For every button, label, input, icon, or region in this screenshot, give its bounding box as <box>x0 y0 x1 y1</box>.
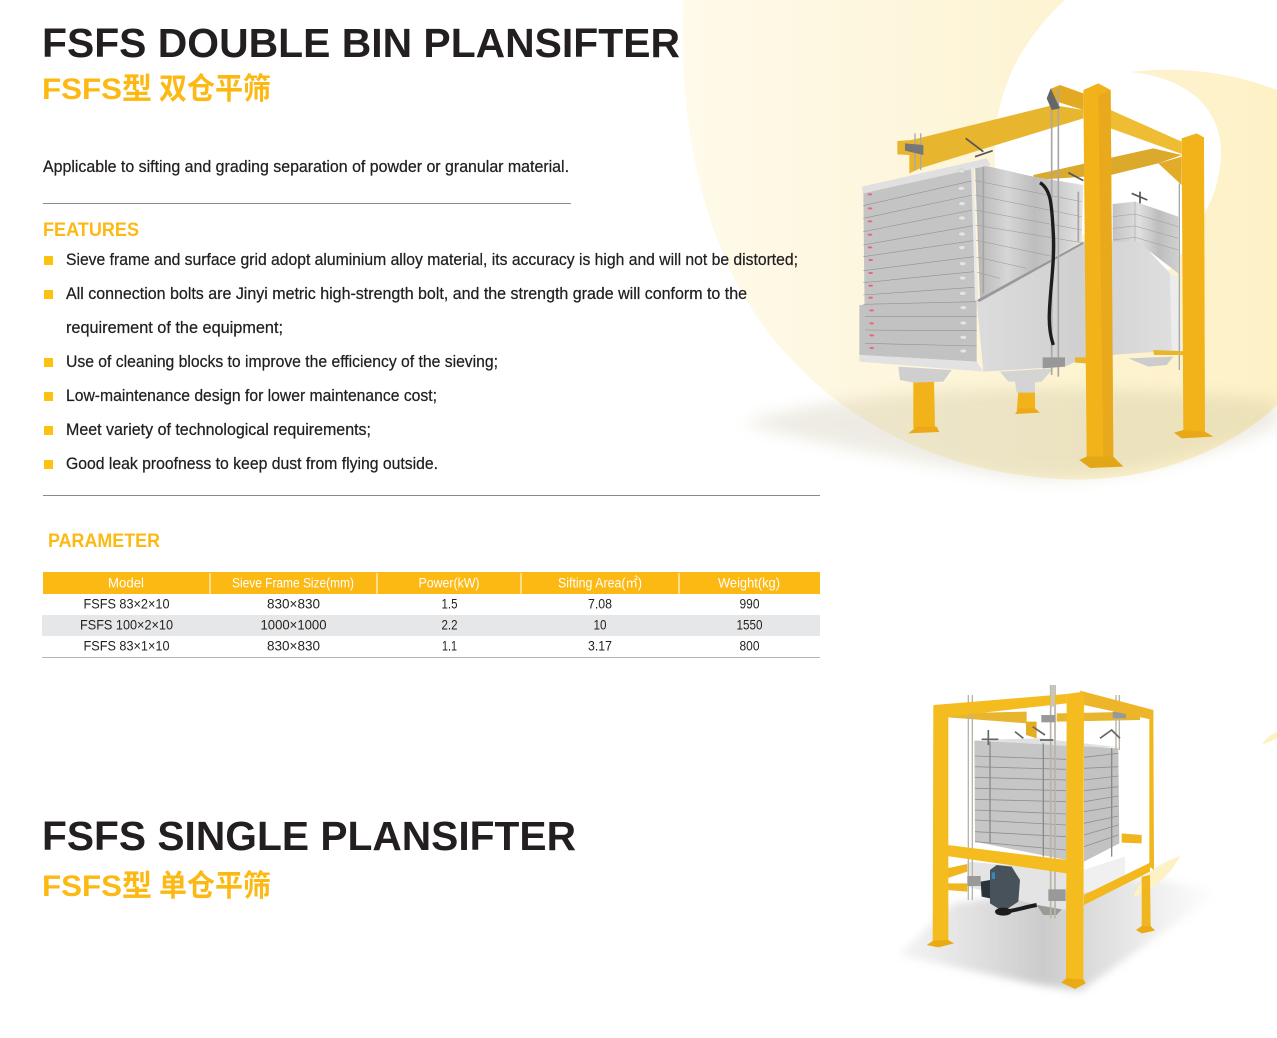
subtitle: single bin Chinese: FSFS <box>42 870 122 903</box>
table row 1 <box>84 596 760 612</box>
hoppers <box>898 367 952 383</box>
table header row: Power(kW) <box>418 576 480 590</box>
subtitle: double bin Chinese <box>42 73 271 106</box>
leaf at edge <box>1263 732 1277 744</box>
subtitle: double bin Chinese: 双仓平筛 <box>159 73 271 106</box>
table row 3: 830×830 <box>267 638 320 654</box>
subtitle: single bin Chinese: 型 <box>122 870 152 903</box>
front post <box>1083 83 1113 458</box>
table header row <box>43 572 820 594</box>
table row 2: 1000×1000 <box>260 618 326 632</box>
table row 3: 800 <box>740 638 760 654</box>
table header row: Weight(kg) <box>718 576 780 590</box>
back beams <box>1033 148 1182 180</box>
left leg <box>913 380 935 428</box>
right rear post <box>1182 133 1205 433</box>
decorative leaf: right edge <box>1262 733 1277 745</box>
motor <box>981 865 1037 916</box>
features list: Meet variety of technological requirements; <box>66 420 371 439</box>
table row 2: 10 <box>594 618 606 632</box>
table row 1: 7.08 <box>588 596 612 612</box>
sieve box <box>974 741 1067 860</box>
illustration: single plansifter <box>898 685 1277 992</box>
base slab <box>1083 857 1125 893</box>
table row 3: 3.17 <box>588 638 612 654</box>
table row 3: FSFS 83×1×10 <box>84 638 170 654</box>
bottom lip <box>859 355 983 372</box>
features list: Use of cleaning blocks to improve the efficiency of the sieving; <box>66 352 498 371</box>
white oval labels <box>958 169 967 353</box>
parameter table <box>42 572 820 658</box>
intro sentence: Applicable to sifting and grading separation of powder or granular material. <box>43 157 569 176</box>
subtitle: single bin Chinese: 单仓平筛 <box>159 870 271 903</box>
features list: Good leak proofness to keep dust from flying outside. <box>66 454 438 473</box>
title: single plansifter: FSFS SINGLE PLANSIFTER <box>42 813 576 859</box>
subtitle: double bin Chinese: 型 <box>122 73 152 106</box>
table row 2: 2.2 <box>442 618 458 632</box>
features list: All connection bolts are Jinyi metric high-strength bolt, and the strength grade will conform to the <box>66 284 747 303</box>
right post <box>1149 710 1154 870</box>
table header row: Sifting Area(㎡) <box>558 576 642 590</box>
right yellow bracket <box>1153 350 1193 355</box>
back beams <box>948 712 1027 723</box>
base panel <box>977 242 1182 372</box>
features heading: FEATURES <box>43 220 139 241</box>
table header row: Model <box>108 576 144 590</box>
subtitle: single bin Chinese <box>42 870 271 903</box>
table row 2: FSFS 100×2×10 <box>80 618 173 632</box>
floor shadow <box>898 877 1220 992</box>
rods and clamps <box>915 88 1179 377</box>
far sieve box <box>1113 202 1178 273</box>
yellow leaf behind frame <box>1133 856 1180 897</box>
table row 3: 1.1 <box>442 638 457 654</box>
background: cream swoosh <box>683 0 1277 479</box>
table row 2 <box>42 615 820 636</box>
title: double bin plansifter: FSFS DOUBLE BIN PLANSIFTER <box>42 20 680 66</box>
illustration: double bin plansifter <box>743 83 1277 479</box>
parameter heading: PARAMETER <box>48 531 160 552</box>
rods and clamps <box>968 685 1119 918</box>
red markers <box>868 193 874 349</box>
table row 1: 830×830 <box>267 596 320 612</box>
frame <box>934 694 1067 717</box>
subtitle: double bin Chinese: FSFS <box>42 73 122 106</box>
floor shadow <box>743 389 1277 479</box>
table row 1: FSFS 83×2×10 <box>84 596 170 612</box>
table header row: Sieve Frame Size(mm) <box>232 576 354 590</box>
table row 2: 1550 <box>736 618 762 632</box>
sieve box front <box>863 167 977 362</box>
sieve box side <box>975 163 1083 299</box>
table row 1: 990 <box>740 596 760 612</box>
table row 3 <box>84 638 760 654</box>
decorative leaf: behind single plansifter <box>1132 856 1180 897</box>
features list: Low-maintenance design for lower maintenance cost; <box>66 386 437 405</box>
middle leg <box>1017 390 1035 413</box>
table row 1: 1.5 <box>442 596 458 612</box>
black cable <box>1040 183 1054 345</box>
features list: requirement of the equipment; <box>66 318 283 337</box>
features list: Sieve frame and surface grid adopt aluminium alloy material, its accuracy is high and will not be distorted; <box>66 250 798 269</box>
features list <box>44 250 798 473</box>
